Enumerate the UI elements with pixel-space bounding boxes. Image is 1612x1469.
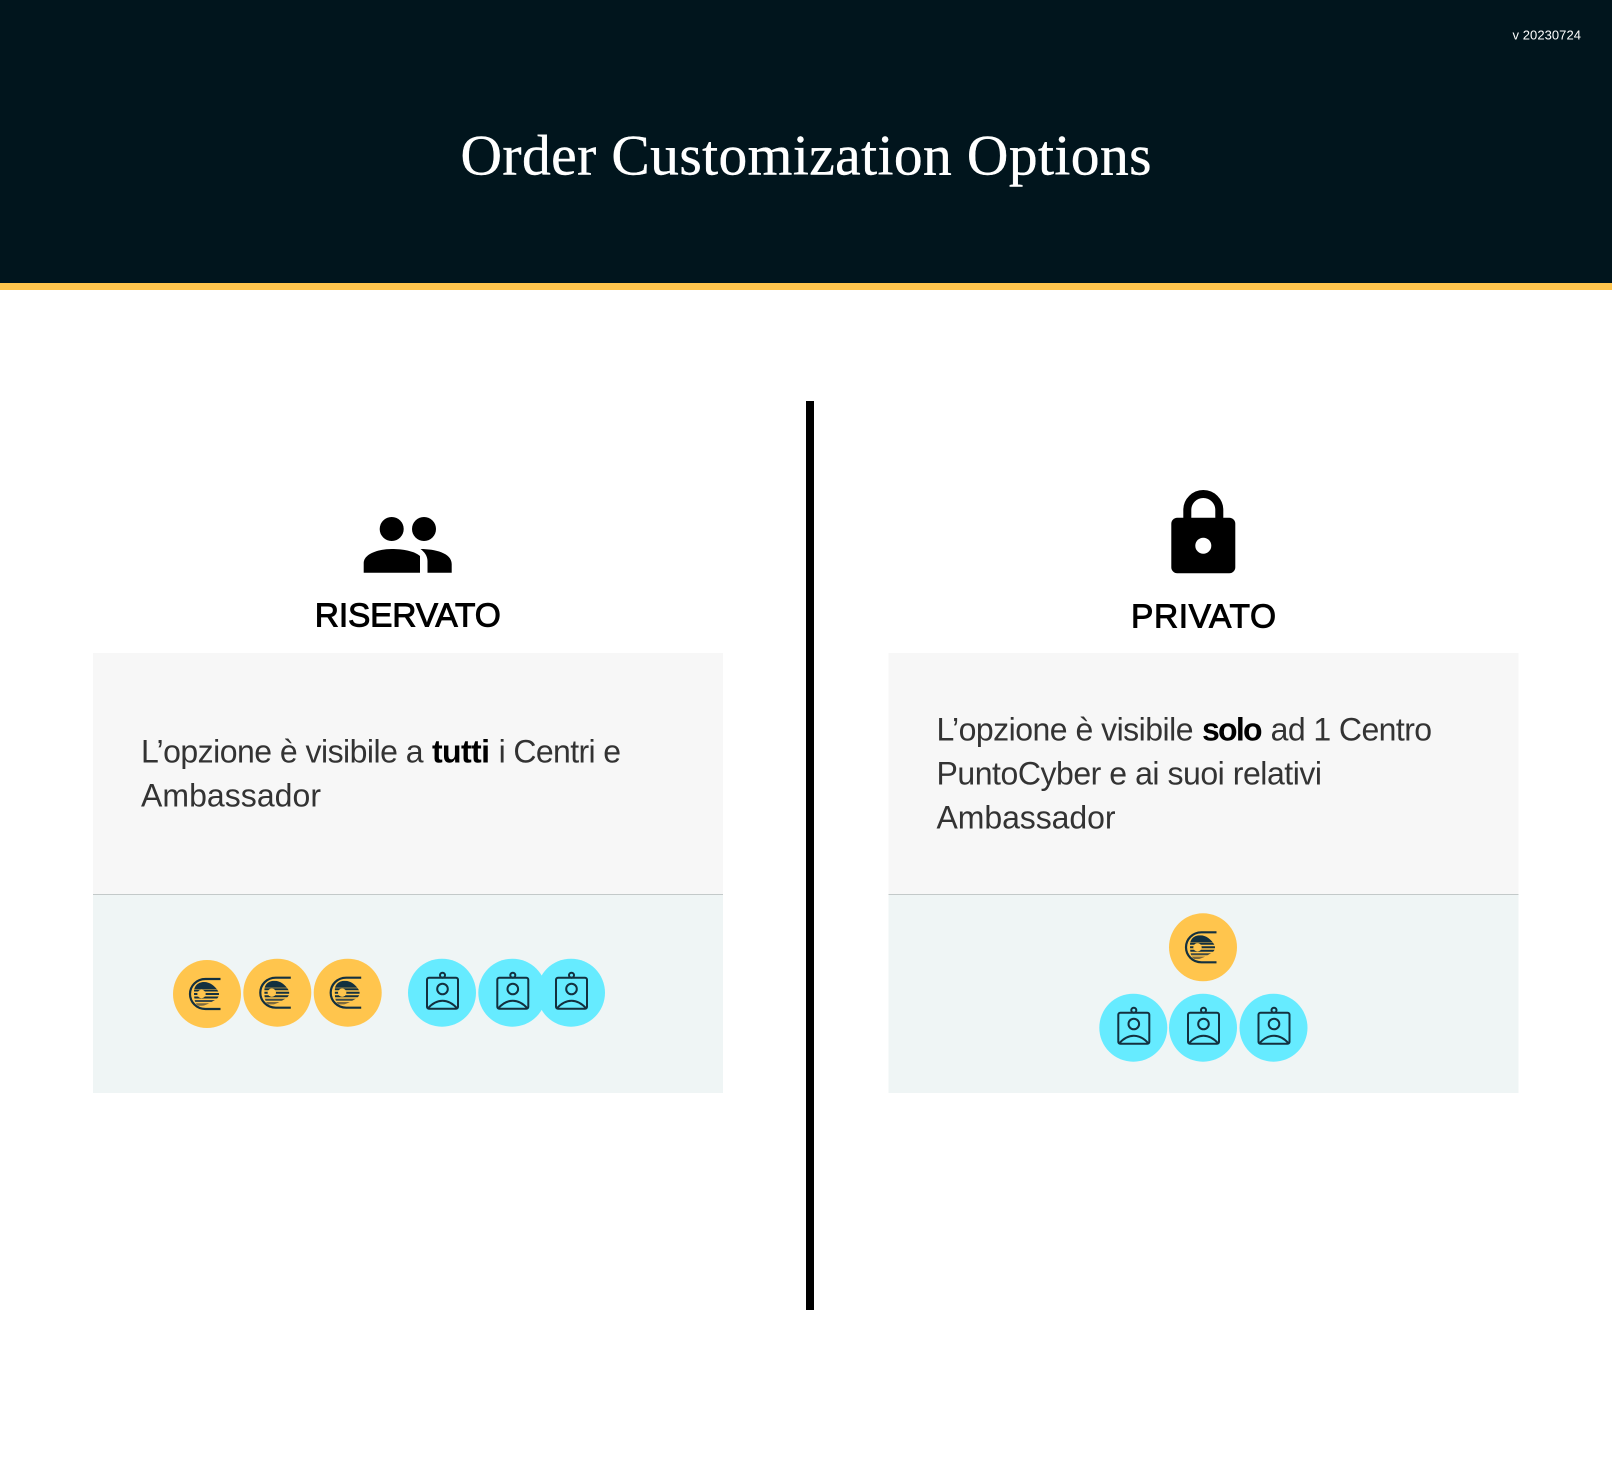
central vertical divider [806, 401, 814, 1310]
description box [888, 653, 1518, 894]
description text: PuntoCyber e ai suoi relativi [936, 756, 1322, 792]
description box [93, 653, 723, 894]
icons: three centres [173, 959, 382, 1028]
description text: ad 1 Centro [1271, 712, 1432, 748]
icon: one centre [1169, 913, 1237, 981]
panel: privato [888, 494, 1518, 1093]
version label: v 20230724 [1512, 28, 1581, 42]
icons: three ambassadors [408, 959, 605, 1027]
panel: riservato [93, 517, 723, 1093]
separator [93, 894, 723, 895]
description text: L’opzione è visibile [936, 712, 1194, 748]
heading: riservato: RISERVATO [315, 598, 501, 634]
heading: privato: PRIVATO [1131, 598, 1276, 636]
audience box [93, 895, 723, 1093]
separator [888, 894, 1518, 895]
description text: Ambassador [141, 778, 321, 814]
header band [0, 0, 1612, 283]
audience box [888, 895, 1518, 1093]
description text: solo [1202, 712, 1262, 748]
description text: Ambassador [936, 800, 1116, 836]
description text: i Centri e [499, 734, 621, 770]
description text: L’opzione è visibile a [141, 734, 424, 770]
icon: two people [364, 517, 452, 573]
icon: padlock [1171, 494, 1235, 573]
title: Order Customization Options [460, 124, 1152, 188]
description text: tutti [432, 734, 490, 770]
icons: three ambassadors [1099, 994, 1308, 1062]
header accent bar [0, 283, 1612, 290]
